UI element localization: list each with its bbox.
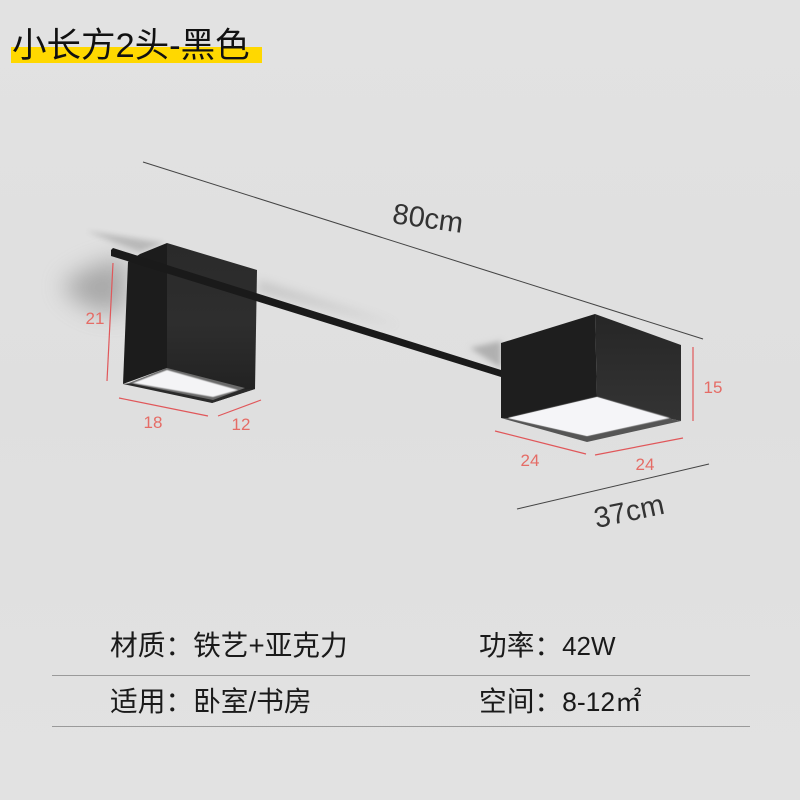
lamp: right square head bbox=[501, 314, 681, 442]
dimension labels: right lamp bbox=[495, 347, 722, 474]
title: 小长方2头-黑色 bbox=[12, 27, 250, 65]
lamp bottom rim bbox=[501, 418, 681, 442]
lamp inner rim bbox=[129, 368, 245, 400]
dimension labels: left lamp: 21 bbox=[86, 309, 104, 328]
spec: material: 材质：铁艺+亚克力 bbox=[110, 630, 348, 661]
dimension labels: right lamp: 24 bbox=[521, 451, 539, 470]
lamp light panel bbox=[508, 397, 670, 436]
dimension labels: left lamp bbox=[86, 263, 261, 434]
dimension labels: left lamp: 12 bbox=[232, 415, 250, 434]
dimension: overall length 80cm: 80cm bbox=[391, 198, 465, 240]
lamp bottom rim bbox=[123, 383, 255, 403]
lamp right face bbox=[167, 243, 257, 403]
rod: horizontal bar bbox=[111, 248, 501, 377]
spec: space: 空间：8-12㎡ bbox=[479, 686, 642, 717]
spec table bbox=[52, 630, 750, 726]
lamp: left small rectangular head bbox=[123, 243, 257, 403]
dimension labels: right lamp: 24 bbox=[636, 455, 654, 474]
dimension: width 37cm: 37cm bbox=[591, 489, 667, 535]
rod shadow on wall bbox=[470, 341, 501, 368]
dimension labels: right lamp: 15 bbox=[704, 378, 722, 397]
lamp left face bbox=[501, 314, 597, 418]
dimension: overall length 80cm bbox=[143, 162, 703, 339]
wall shadows bbox=[62, 231, 400, 326]
dimension labels: left lamp: 18 bbox=[144, 413, 162, 432]
spec: usage: 适用：卧室/书房 bbox=[110, 686, 312, 717]
lamp left face bbox=[123, 243, 167, 384]
lamp right face bbox=[595, 314, 681, 421]
spec: power: 功率：42W bbox=[479, 630, 616, 661]
dimension: width 37cm bbox=[517, 464, 709, 535]
lamp light panel bbox=[133, 370, 238, 397]
